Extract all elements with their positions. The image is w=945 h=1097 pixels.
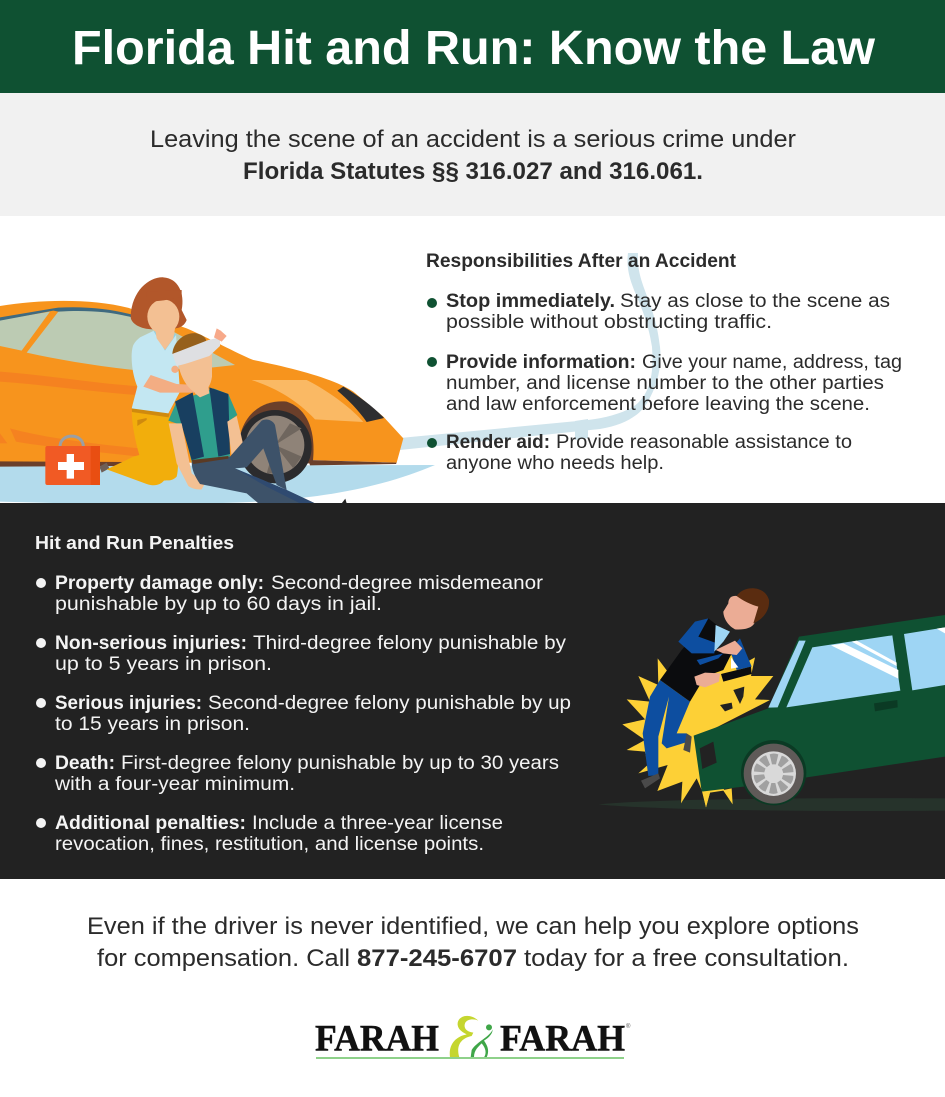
logo: Farah & Farah: FARAH	[315, 1018, 439, 1060]
legs and shoes	[643, 680, 690, 776]
bullet: serious injuries	[36, 693, 571, 735]
woman	[107, 277, 187, 485]
jacket body	[660, 618, 732, 702]
bullet: stop immediately: Stop immediately.	[446, 291, 615, 312]
illustration: pedestrian hit by green car	[598, 588, 945, 811]
bullet: render aid: Provide reasonable assistance to	[556, 432, 852, 453]
man hit by the car	[641, 588, 769, 788]
far wheel-side leg	[192, 419, 315, 503]
bullet: property damage: Property damage only:	[55, 573, 264, 594]
bullet: non-serious injuries: Third-degree felony punishable by	[253, 633, 567, 654]
ground shadow	[0, 465, 435, 503]
bullet: property damage: Second-degree misdemeanor	[271, 573, 544, 594]
responsibilities heading: Responsibilities After an Accident	[426, 251, 737, 272]
bullet: provide information: and law enforcement before leaving the scene.	[446, 394, 870, 415]
bullet: non-serious injuries	[36, 633, 567, 675]
responsibilities text block	[426, 251, 902, 474]
bullet: stop immediately	[427, 291, 890, 333]
yellow impact burst	[622, 655, 773, 807]
car headlight highlight	[252, 380, 363, 422]
head and hair	[723, 596, 759, 629]
bullet: property damage: punishable by up to 60 days in jail.	[55, 594, 382, 615]
intro panel: Florida Statutes §§ 316.027 and 316.061.	[243, 158, 703, 185]
car windscreen and windows	[768, 641, 806, 708]
bullet: additional penalties: Include a three-year license	[252, 813, 503, 834]
car wheel	[233, 401, 314, 463]
bullet: stop immediately: possible without obstructing traffic.	[446, 312, 772, 333]
car wheel	[741, 740, 806, 805]
bullet: serious injuries: Serious injuries:	[55, 693, 202, 714]
bullet: additional penalties: revocation, fines, restitution, and license points.	[55, 834, 484, 855]
grey shoe	[99, 463, 109, 473]
bullet: provide information	[427, 352, 902, 415]
title banner	[0, 0, 945, 93]
man's head	[178, 354, 212, 392]
logo: Farah & Farah	[315, 1016, 631, 1060]
green car	[694, 615, 945, 792]
neck	[195, 387, 209, 397]
logo: Farah & Farah: FARAH	[500, 1018, 625, 1060]
logo: Farah & Farah: ®	[626, 1023, 631, 1030]
illustration: accident scene with car and first aid	[0, 277, 435, 503]
car windows	[0, 312, 50, 351]
call to action text	[87, 913, 859, 972]
road stripe behind responsibilities text	[400, 253, 660, 450]
penalties panel	[0, 503, 945, 879]
intro panel	[0, 93, 945, 216]
call to action text: Even if the driver is never identified, we can help you explore options	[87, 913, 859, 940]
woman's forearm	[143, 375, 195, 393]
bullet: death: First-degree felony punishable by up to 30 years	[121, 753, 559, 774]
bullet: property damage	[36, 573, 544, 615]
hands	[716, 641, 742, 655]
bullet: render aid	[427, 432, 852, 474]
bullet: provide information: Give your name, address, tag	[642, 352, 902, 373]
orange car body	[0, 301, 403, 463]
call to action text: today for a free consultation.	[524, 945, 849, 972]
first aid kit	[45, 436, 100, 485]
bullet: death	[36, 753, 559, 795]
call to action text: for compensation. Call	[97, 945, 350, 972]
bullet: non-serious injuries: up to 5 years in prison.	[55, 654, 272, 675]
logo ampersand mark	[450, 1016, 493, 1057]
bullet: provide information: number, and license number to the other parties	[446, 373, 884, 394]
bullet: serious injuries: Second-degree felony punishable by up	[208, 693, 571, 714]
bullet: death: Death:	[55, 753, 115, 774]
bullet: render aid: anyone who needs help.	[446, 453, 664, 474]
bullet: render aid: Render aid:	[446, 432, 550, 453]
bullet: stop immediately: Stay as close to the scene as	[620, 291, 890, 312]
blue upper arm behind	[730, 638, 752, 670]
bullet: non-serious injuries: Non-serious injuries:	[55, 633, 247, 654]
injured man	[143, 328, 315, 503]
bullet: death: with a four-year minimum.	[54, 774, 295, 795]
bullet: additional penalties: Additional penalties:	[55, 813, 246, 834]
intro panel: Leaving the scene of an accident is a serious crime under	[150, 126, 796, 153]
bullet: serious injuries: to 15 years in prison.	[55, 714, 250, 735]
penalties heading: Hit and Run Penalties	[35, 533, 234, 553]
title banner: Florida Hit and Run: Know the Law	[72, 22, 876, 75]
ground shadow	[598, 798, 945, 811]
call to action text: 877-245-6707	[357, 945, 517, 972]
bullet: additional penalties	[36, 813, 503, 855]
door handle and headlight	[874, 700, 898, 711]
bullet: provide information: Provide information:	[446, 352, 636, 373]
